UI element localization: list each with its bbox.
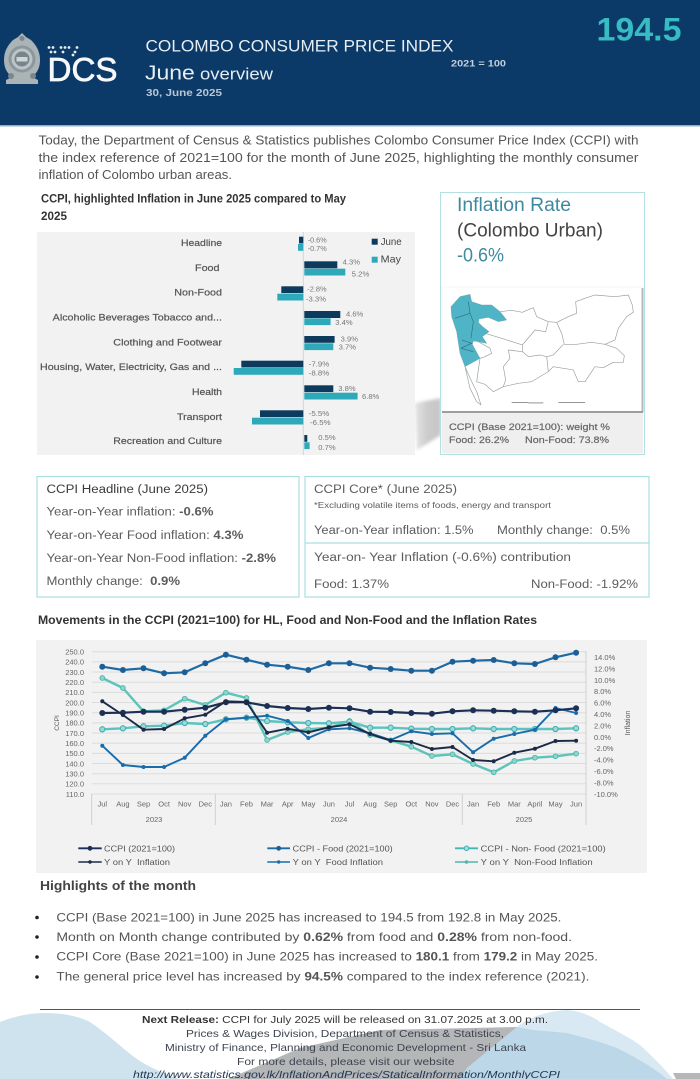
headline index value: 194.5: [596, 12, 682, 48]
value labels: [306, 236, 380, 452]
subtitle: June overview: [145, 62, 273, 84]
footer rule: [40, 1008, 640, 1010]
heading: bar chart: CCPI, highlighted Inflation in June 2025 compared to May: [41, 194, 347, 206]
data series: [102, 653, 576, 772]
series: CCPI headline: [102, 702, 576, 714]
footer decorative waves: [0, 1010, 700, 1079]
monthly change: Monthly change: 0.9%: [46, 576, 180, 588]
month labels: Feb: [240, 800, 253, 809]
highlights list: CCPI (Base 2021=100) in June 2025 has increased to 194.5 from 192.8 in May 2025.: [56, 911, 561, 925]
year on year inflation: Year-on-Year inflation: -0.6%: [46, 507, 214, 519]
month labels: Sep: [384, 800, 397, 809]
highlights list: The general price level has increased by 94.5% compared to the index reference (2021).: [56, 970, 589, 984]
right axis labels: -4.0%: [594, 756, 614, 765]
right axis labels: 12.0%: [594, 664, 616, 673]
series: CCPI food: [102, 653, 576, 673]
left axis labels: 150.0: [65, 749, 84, 758]
category labels: Recreation and Culture: [113, 436, 222, 447]
value labels: -0.6%: [308, 236, 327, 244]
highlights list: Month on Month change contributed by 0.62% from food and 0.28% from non-food.: [56, 930, 572, 944]
right axis labels: 6.0%: [594, 699, 611, 708]
bar chart shadow: [415, 398, 441, 450]
category labels: Food: [195, 263, 220, 274]
left axis labels: 220.0: [65, 678, 84, 687]
legend: June: [381, 236, 402, 248]
month labels: Jun: [323, 800, 335, 809]
weights caption: Non-Food: 73.8%: [525, 435, 610, 446]
heading: bar chart: [41, 194, 347, 223]
right axis labels: 0.0%: [594, 733, 611, 742]
core panel title: CCPI Core* (June 2025): [314, 484, 457, 496]
chart legend: CCPI - Non- Food (2021=100): [481, 844, 606, 854]
left axis labels: 240.0: [65, 658, 84, 667]
year labels: 2024: [331, 815, 347, 824]
footer text: Prices & Wages Division, Department of Census & Statistics,: [186, 1028, 504, 1040]
chart legend: Y on Y Non-Food Inflation: [481, 857, 593, 867]
weights caption: Food: 26.2%: [449, 435, 510, 446]
legend: [372, 236, 402, 266]
value labels: 4.3%: [343, 258, 360, 266]
non-food contribution: Non-Food: -1.92%: [531, 579, 638, 591]
chart legend: [78, 844, 606, 867]
month labels: April: [527, 800, 543, 809]
value labels: -7.9%: [309, 360, 330, 368]
category labels: Alcoholic Beverages Tobacco and...: [53, 312, 222, 324]
year labels: 2025: [516, 815, 532, 824]
month labels: [98, 800, 582, 809]
value labels: -0.7%: [308, 244, 327, 253]
food inflation: Year-on-Year Food inflation: 4.3%: [46, 530, 244, 542]
month labels: Jul: [98, 800, 107, 809]
left axis labels: 210.0: [65, 688, 84, 697]
month labels: Nov: [178, 800, 192, 809]
highlights list: [35, 911, 598, 984]
map of Colombo urban areas: [442, 287, 644, 413]
month labels: May: [301, 800, 316, 809]
left axis labels: 180.0: [65, 719, 84, 728]
right axis labels: 14.0%: [594, 653, 616, 662]
right axis labels: [594, 653, 618, 799]
month labels: May: [548, 800, 563, 809]
month labels: Jun: [570, 800, 582, 809]
legend: May: [381, 254, 402, 266]
footer text: [133, 1014, 560, 1079]
intro text: inflation of Colombo urban areas.: [38, 168, 232, 182]
left axis labels: 120.0: [65, 780, 84, 789]
right axis labels: 4.0%: [594, 710, 611, 719]
month labels: Oct: [405, 800, 418, 809]
series: Y on Y food inflation: [102, 708, 576, 767]
core footnote: *Excluding volatile items of foods, energy and transport: [314, 501, 552, 510]
month labels: Nov: [425, 800, 439, 809]
month labels: Oct: [158, 800, 171, 809]
chart legend: Y on Y Inflation: [104, 857, 170, 867]
left axis labels: 200.0: [65, 698, 84, 707]
footer text: For more details, please visit our website: [237, 1056, 455, 1068]
series: CCPI non-food: [102, 718, 576, 729]
right axis labels: -10.0%: [594, 790, 618, 799]
value labels: -8.8%: [309, 368, 330, 378]
right axis labels: 8.0%: [594, 687, 611, 696]
core year on year: Year-on-Year inflation: 1.5%: [314, 525, 474, 537]
June bars: [241, 237, 340, 442]
series: Y on Y inflation: [102, 701, 576, 761]
title: COLOMBO CONSUMER PRICE INDEX: [146, 36, 454, 56]
category labels: Transport: [177, 412, 222, 423]
core monthly change: Monthly change: 0.5%: [497, 525, 630, 537]
headline panel title: CCPI Headline (June 2025): [46, 484, 208, 496]
bar chart: inflation by category: [37, 232, 415, 455]
panel: inflation rate and map: [440, 192, 644, 454]
left axis labels: 110.0: [66, 790, 84, 799]
food contribution: Food: 1.37%: [314, 579, 389, 591]
value labels: 3.9%: [341, 334, 358, 344]
footer text: Next Release: CCPI for July 2025 will be released on 31.07.2025 at 3.00 p.m.: [142, 1014, 548, 1026]
heading: bar chart: 2025: [41, 211, 68, 223]
non-food inflation: Year-on-Year Non-Food inflation: -2.8%: [46, 553, 276, 565]
month labels: Feb: [487, 800, 500, 809]
contribution heading: Year-on- Year Inflation (-0.6%) contribution: [314, 552, 571, 564]
inflation rate label: Inflation Rate: [457, 195, 571, 216]
month labels: Jan: [467, 800, 479, 809]
value labels: -5.5%: [309, 409, 330, 418]
logo: DCS wordmark: DCS: [48, 51, 118, 88]
month labels: Mar: [508, 800, 521, 809]
value labels: -3.3%: [306, 294, 326, 304]
chart legend: CCPI - Food (2021=100): [293, 844, 393, 854]
month labels: Dec: [199, 800, 212, 809]
year labels: [146, 815, 532, 824]
month labels: Dec: [446, 800, 459, 809]
weights caption: [442, 413, 643, 454]
month labels: Jul: [345, 800, 355, 809]
header banner: [0, 0, 700, 126]
right axis labels: -2.0%: [594, 744, 614, 753]
right axis labels: -8.0%: [594, 778, 614, 787]
chart legend: CCPI (2021=100): [104, 844, 175, 854]
value labels: -2.8%: [307, 284, 327, 294]
left axis labels: 250.0: [65, 648, 84, 656]
icon: national emblem: [4, 33, 40, 84]
inflation rate value: -0.6%: [457, 246, 504, 267]
value labels: 3.7%: [339, 342, 356, 352]
left axis labels: 130.0: [65, 770, 84, 778]
intro text: the index reference of 2021=100 for the month of June 2025, highlighting the monthly consumer: [38, 151, 638, 165]
value labels: 0.5%: [318, 433, 336, 442]
month labels: Aug: [116, 800, 130, 809]
left axis labels: 160.0: [65, 739, 84, 748]
month labels: Apr: [282, 800, 294, 809]
left axis labels: [65, 648, 84, 799]
month labels: Jan: [220, 800, 232, 809]
panel: CCPI headline: [37, 476, 299, 597]
right axis labels: 10.0%: [594, 676, 616, 685]
index reference: 2021 = 100: [451, 58, 506, 70]
location label: (Colombo Urban): [457, 221, 603, 242]
category labels: Non-Food: [174, 288, 222, 298]
left axis labels: 140.0: [65, 759, 84, 768]
right axis labels: -6.0%: [594, 767, 614, 776]
value labels: 3.8%: [338, 384, 356, 393]
year labels: 2023: [146, 815, 162, 824]
left axis title: CCPI: [54, 715, 61, 731]
value labels: 3.4%: [335, 318, 353, 327]
value labels: 5.2%: [352, 270, 370, 278]
value labels: -6.5%: [310, 418, 331, 427]
May bars: [234, 244, 358, 449]
series: Y on Y non-food inflation: [102, 678, 576, 772]
right axis labels: 2.0%: [594, 721, 611, 730]
line chart: CCPI and inflation rates: [36, 640, 647, 873]
category labels: Clothing and Footwear: [113, 338, 222, 348]
panel: CCPI core: [305, 476, 649, 597]
heading: highlights: Highlights of the month: [40, 878, 196, 893]
category labels: [40, 238, 222, 447]
chart legend: Y on Y Food Inflation: [293, 857, 383, 867]
value labels: 4.6%: [346, 310, 364, 318]
value labels: 6.8%: [362, 392, 380, 401]
category labels: Health: [192, 387, 222, 398]
category labels: Housing, Water, Electricity, Gas and ...: [40, 362, 222, 373]
left axis labels: 190.0: [65, 708, 84, 718]
weights caption: CCPI (Base 2021=100): weight %: [449, 422, 611, 433]
heading: line chart: Movements in the CCPI (2021=100) for HL, Food and Non-Food and the Inflation Rates: [38, 613, 537, 627]
date: 30, June 2025: [146, 87, 222, 99]
intro text: Today, the Department of Census & Statistics publishes Colombo Consumer Price Index (CCPI) with: [38, 134, 639, 148]
month labels: Aug: [363, 800, 377, 809]
left axis labels: 230.0: [65, 668, 84, 677]
month labels: Sep: [137, 800, 150, 809]
month labels: Mar: [261, 800, 274, 809]
category labels: Headline: [181, 238, 222, 249]
highlights list: CCPI Core (Base 2021=100) in June 2025 has increased to 180.1 from 179.2 in May 2025.: [56, 950, 598, 964]
value labels: 0.7%: [318, 443, 336, 452]
left axis labels: 170.0: [65, 729, 84, 738]
footer text: Ministry of Finance, Planning and Economic Development - Sri Lanka: [165, 1042, 526, 1054]
right axis title: Inflation: [625, 711, 632, 735]
intro text: [38, 134, 639, 182]
